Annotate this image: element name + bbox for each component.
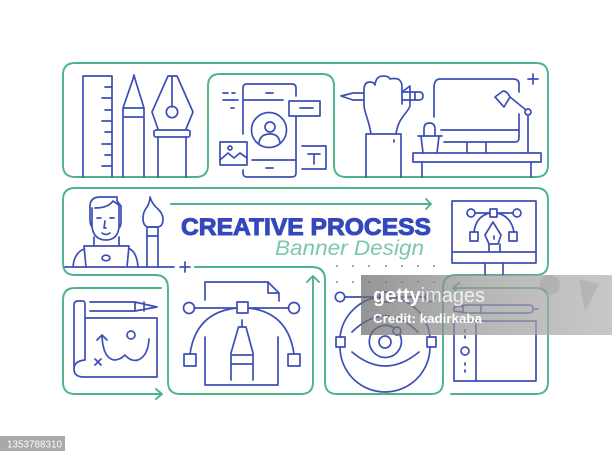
icon: smartphone with profile [243,84,296,177]
icon: desk [413,153,541,177]
plus mark top [528,74,538,84]
watermark credit: Credit: kadirkaba [373,312,483,326]
icon: vector monitor [452,201,536,275]
icon: paint brush [143,197,163,267]
decorative dots [336,265,435,283]
icon: desk lamp [495,91,531,153]
icon: vector pen tool [184,282,300,385]
icon: hand holding pencil [341,76,423,177]
icon: potted cactus [418,123,442,153]
icon: picture [220,142,247,165]
icon: drawing tablet [454,305,538,381]
title: CREATIVE PROCESS [181,214,431,241]
icon: pencil [123,75,144,177]
icon: message tag [289,101,320,116]
icon: designer with laptop [65,197,174,267]
green panel frames [63,63,548,399]
icon: orbit vector [335,292,436,392]
watermark brand: gettyimages [373,285,485,307]
icon: small lines [223,93,238,108]
subtitle: Banner Design [275,237,424,260]
icon: desktop monitor [434,79,519,153]
icon: ruler [83,76,112,177]
plus mark middle [180,262,190,272]
icon: map with pencil [74,301,157,377]
watermark band [361,275,612,335]
icon: fountain pen nib [152,76,193,177]
image id badge: 1353788310 [7,438,62,450]
watermark shapes [540,275,599,312]
icon: text box [302,146,326,169]
